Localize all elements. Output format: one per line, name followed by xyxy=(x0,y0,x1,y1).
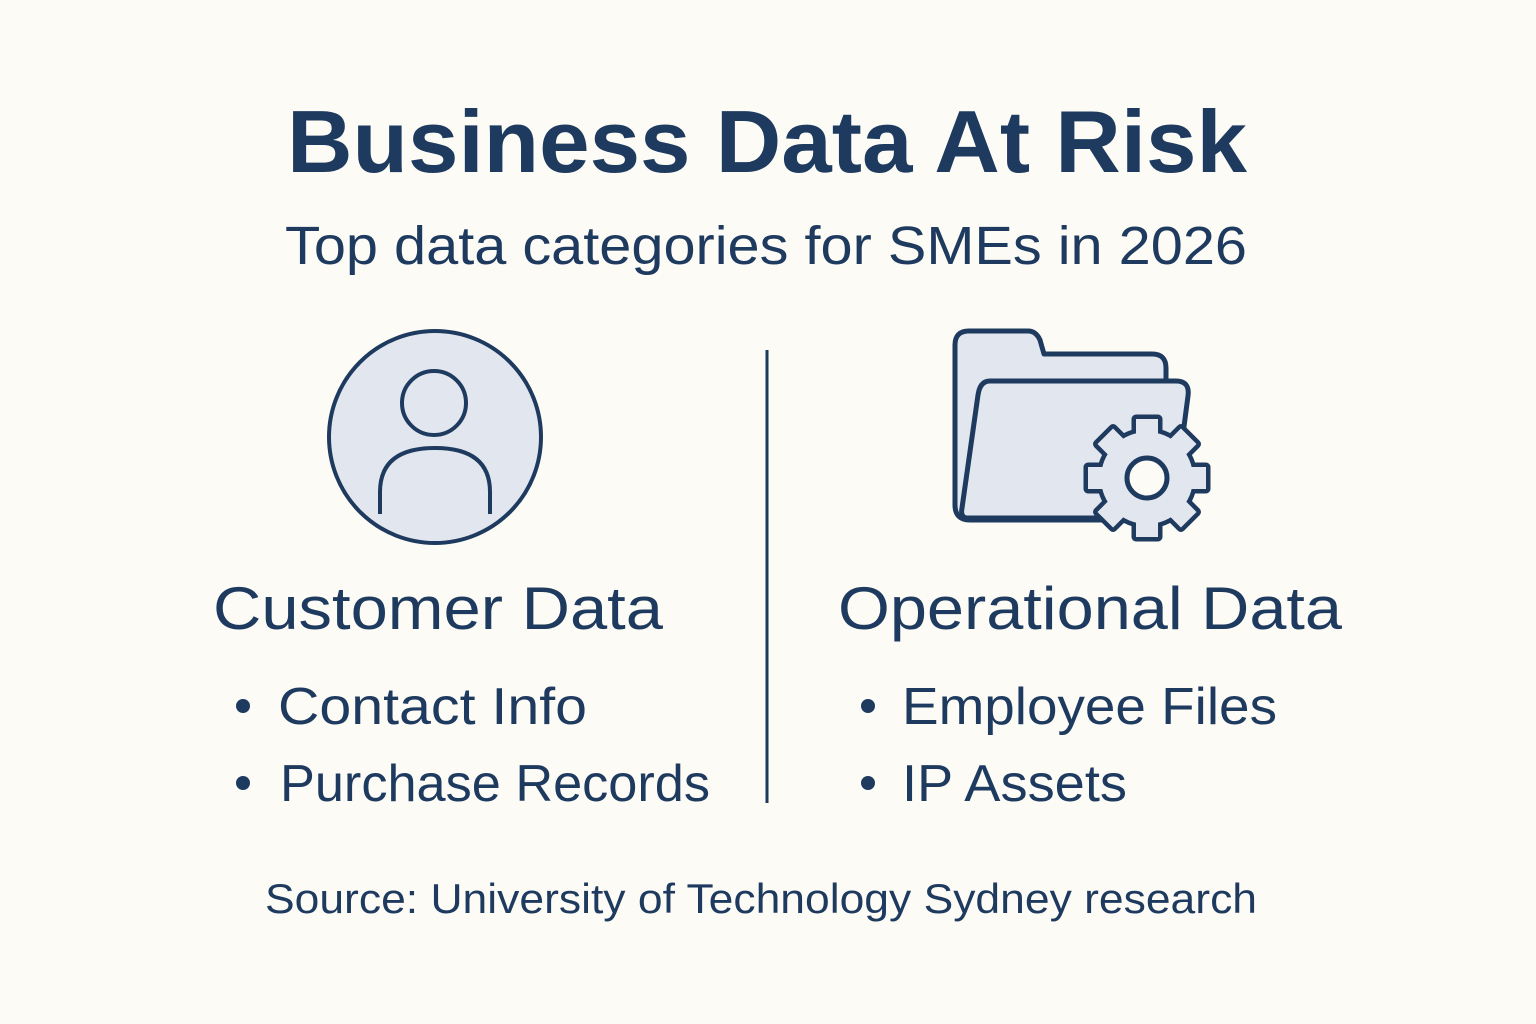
title: Business Data At Risk xyxy=(287,92,1248,191)
heading: operational data: Operational Data xyxy=(838,575,1343,642)
divider xyxy=(766,350,768,803)
list: customer data: Purchase Records xyxy=(280,755,710,813)
icon: folder with gear xyxy=(955,331,1206,537)
heading: customer data: Customer Data xyxy=(213,575,664,642)
list: operational data xyxy=(861,678,1277,813)
list: operational data: IP Assets xyxy=(902,755,1127,813)
list: customer data xyxy=(236,678,710,813)
list: operational data: Employee Files xyxy=(902,678,1277,736)
subtitle: Top data categories for SMEs in 2026 xyxy=(285,216,1247,276)
list: customer data: Contact Info xyxy=(278,678,587,736)
source note: Source: University of Technology Sydney research xyxy=(265,875,1257,922)
icon: customer person xyxy=(329,331,541,543)
